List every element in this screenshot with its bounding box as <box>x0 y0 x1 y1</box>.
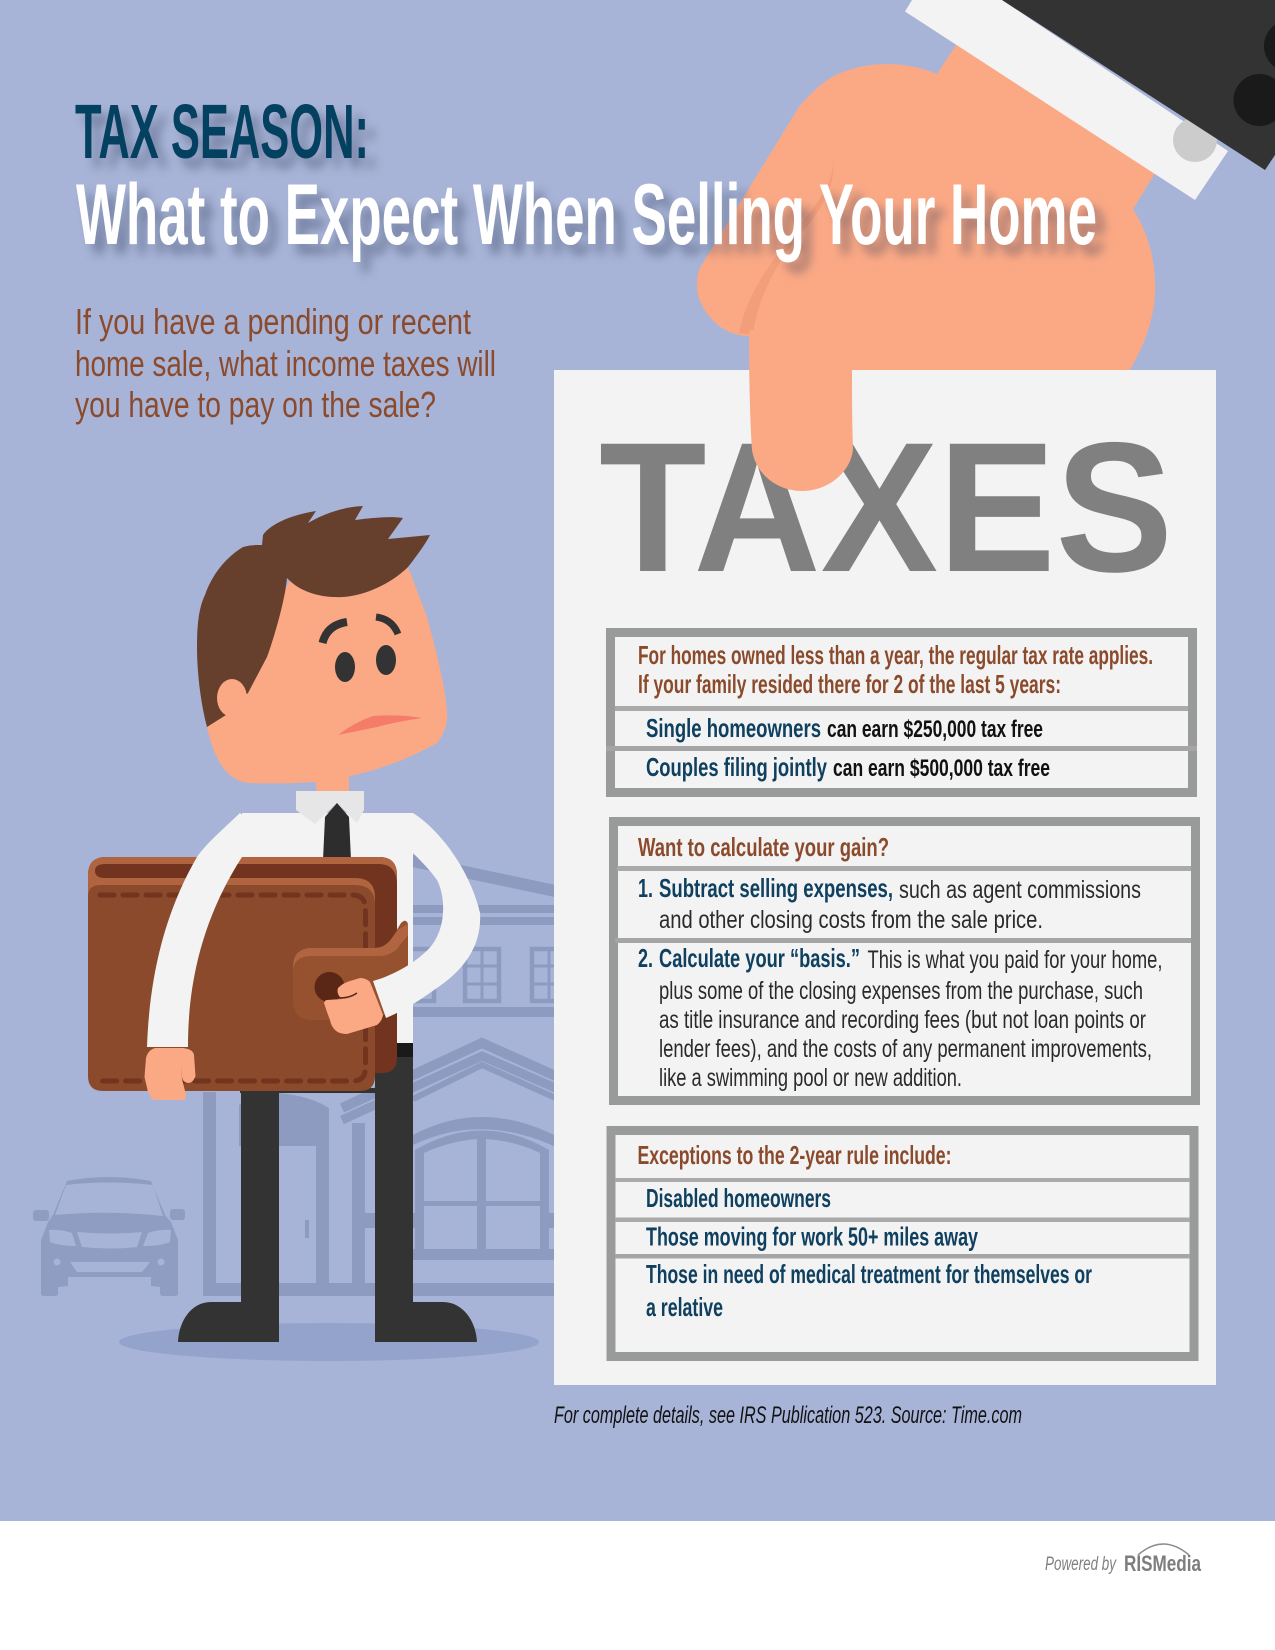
panel: exceptions: Disabled homeowners <box>646 1183 831 1213</box>
panel: calculate your gain: This is what you paid for your home, <box>868 946 1162 974</box>
illustration: house background <box>203 860 562 1296</box>
panel: calculate your gain <box>614 822 1196 1100</box>
panel: calculate your gain: and other closing costs from the sale price. <box>659 906 1043 934</box>
panel: exceptions: Exceptions to the 2-year rule include: <box>638 1140 952 1170</box>
footer <box>0 1521 1275 1650</box>
title <box>75 89 1097 263</box>
panel: calculate your gain: 2. <box>638 943 653 973</box>
panel: tax rates: can earn $500,000 tax free <box>833 755 1050 782</box>
illustration: car <box>33 1177 185 1296</box>
panel: calculate your gain: Subtract selling expenses, <box>659 873 893 903</box>
illustration: hand palm and cuff <box>697 0 1275 400</box>
logo: Powered by RISMedia: Powered by <box>1045 1554 1117 1575</box>
panel: tax rates <box>606 632 1197 792</box>
intro text: you have to pay on the sale? <box>75 384 436 425</box>
intro text: home sale, what income taxes will <box>75 343 496 384</box>
big heading: TAXES: TAXES <box>599 405 1173 611</box>
logo: Powered by RISMedia: RISMedia <box>1124 1551 1202 1576</box>
panel: tax rates: If your family resided there for 2 of the last 5 years: <box>638 669 1061 699</box>
title: TAX SEASON: <box>75 89 369 175</box>
panel: tax rates: Couples filing jointly <box>646 752 827 782</box>
panel: calculate your gain: Want to calculate your gain? <box>638 832 889 862</box>
panel: exceptions <box>611 1130 1194 1356</box>
footnote: For complete details, see IRS Publication 523. Source: Time.com <box>554 1402 1022 1429</box>
panel: tax rates: can earn $250,000 tax free <box>827 716 1043 743</box>
illustration: man with wallet <box>88 506 539 1361</box>
intro text: If you have a pending or recent <box>75 301 471 342</box>
intro text <box>75 301 496 425</box>
panel: exceptions: a relative <box>646 1292 723 1322</box>
panel: calculate your gain: Calculate your “basis.” <box>659 943 860 973</box>
panel: calculate your gain: 1. <box>638 873 653 903</box>
logo: Powered by RISMedia <box>1045 1544 1202 1576</box>
panel: calculate your gain: such as agent commissions <box>899 876 1141 904</box>
paper panel <box>554 370 1216 1385</box>
panel: tax rates: Single homeowners <box>646 713 821 743</box>
panel: exceptions: Those moving for work 50+ miles away <box>646 1222 978 1252</box>
panel: calculate your gain: like a swimming pool or new addition. <box>659 1064 962 1092</box>
illustration: pointing finger <box>749 330 853 491</box>
